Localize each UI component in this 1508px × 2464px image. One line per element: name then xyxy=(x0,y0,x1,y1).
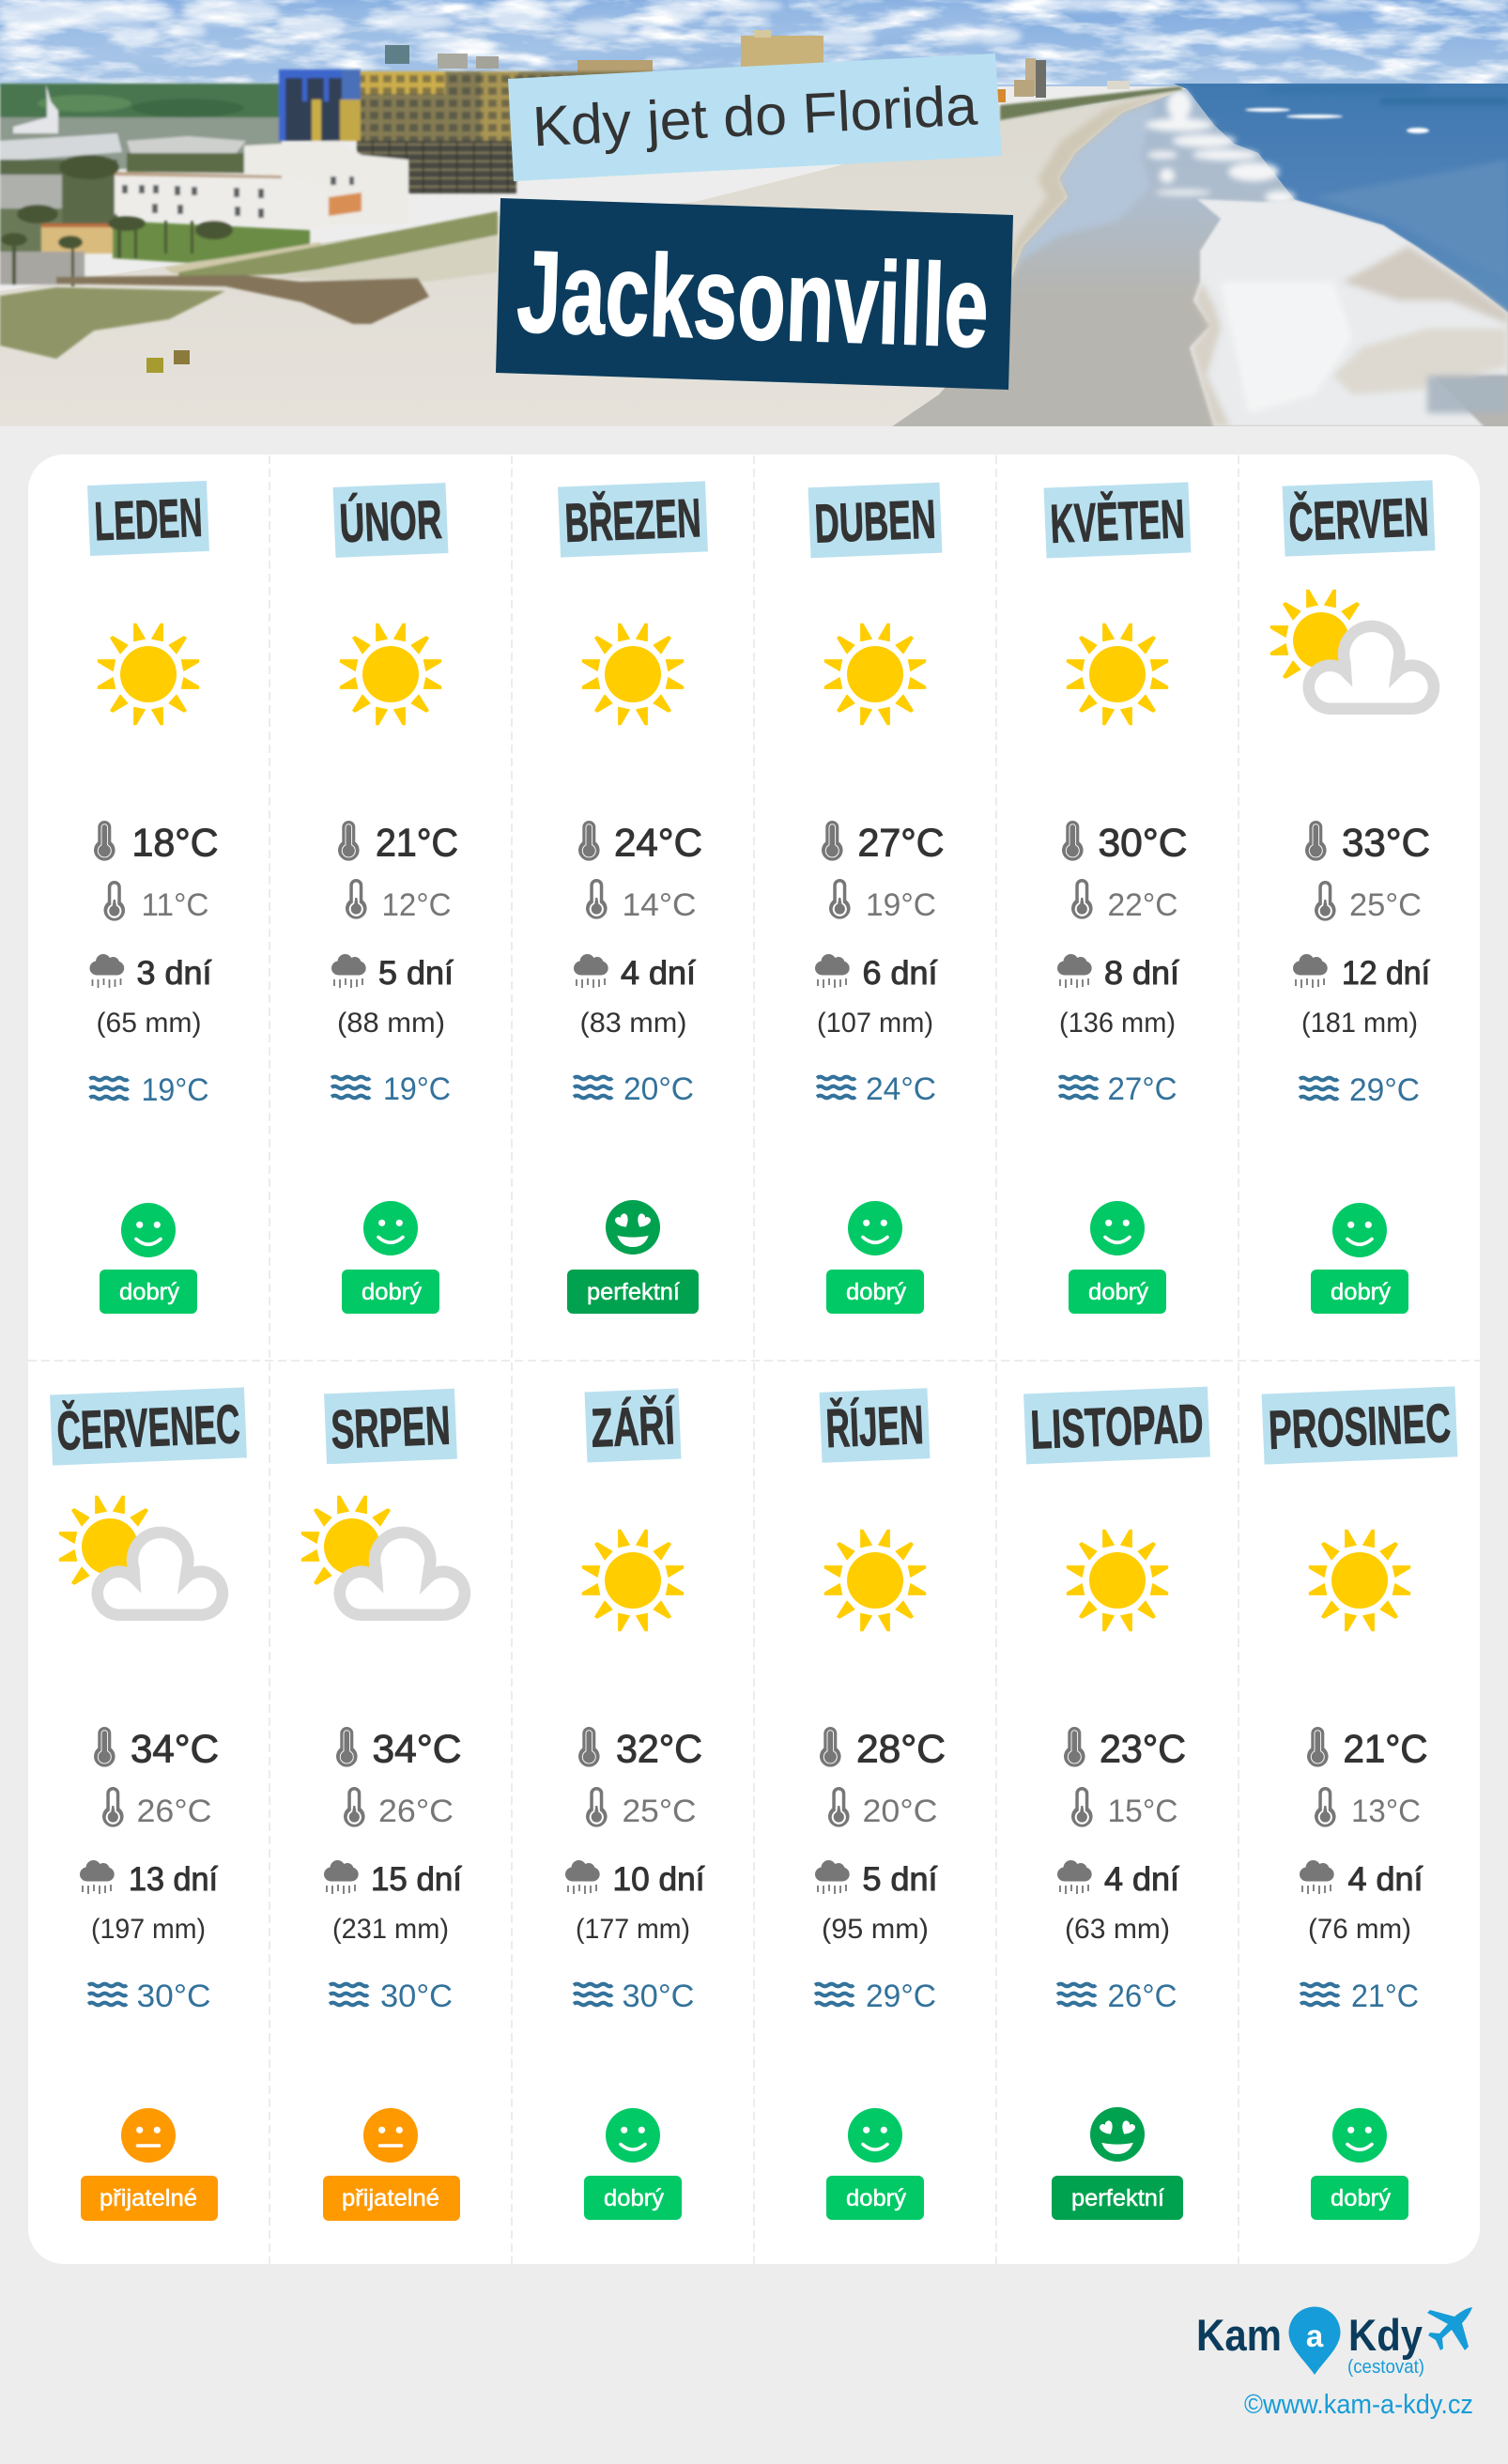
sea temperature: 30°C xyxy=(380,1979,453,2014)
rating badge: přijatelné xyxy=(342,2185,439,2211)
label: září xyxy=(585,1389,681,1462)
month: říjen xyxy=(815,1388,946,2220)
smiley: good xyxy=(1332,2108,1387,2163)
min temperature xyxy=(1315,1787,1421,1829)
rainfall: (231 mm) xyxy=(332,1914,449,1945)
rain days xyxy=(331,954,454,992)
min temperature: 20°C xyxy=(862,1794,937,1829)
month: únor xyxy=(331,483,458,1314)
rating badge: dobrý xyxy=(1088,1279,1149,1305)
rain days xyxy=(1300,1860,1423,1898)
sea temperature: 19°C xyxy=(141,1072,208,1108)
max temperature xyxy=(1307,1726,1427,1771)
rating badge: dobrý xyxy=(604,2185,665,2211)
label: duben xyxy=(808,483,942,558)
rating badge: perfektní xyxy=(587,1279,680,1305)
rain days: 4 dní xyxy=(1104,1861,1179,1898)
icon: sunny xyxy=(824,1530,926,1631)
min temperature xyxy=(1315,881,1422,923)
max temperature: 21°C xyxy=(376,821,458,864)
min temperature xyxy=(103,881,208,923)
min temperature: 25°C xyxy=(1349,887,1422,923)
month: srpen xyxy=(301,1389,465,2221)
rain days xyxy=(815,954,938,992)
max temperature: 34°C xyxy=(372,1726,462,1771)
month: červenec xyxy=(50,1387,247,2221)
rainfall: (95 mm) xyxy=(822,1914,929,1945)
rain days xyxy=(90,954,212,992)
rating badge xyxy=(1069,1270,1166,1314)
min temperature xyxy=(344,1787,454,1829)
min temperature: 14°C xyxy=(622,887,697,923)
icon: sunny xyxy=(582,624,684,725)
sea temperature xyxy=(817,1071,936,1107)
smiley: good xyxy=(848,1201,902,1255)
rating badge xyxy=(323,2176,460,2221)
sea temperature: 29°C xyxy=(866,1979,936,2014)
sea temperature xyxy=(88,1979,210,2014)
label: březen xyxy=(558,481,708,558)
rain days: 15 dní xyxy=(371,1861,462,1898)
rain days: 4 dní xyxy=(621,955,696,992)
label: únor xyxy=(333,483,448,558)
label: listopad xyxy=(1023,1387,1210,1464)
month: listopad xyxy=(1023,1387,1210,2220)
label: listopad: LISTOPAD xyxy=(1029,1393,1205,1461)
rating badge xyxy=(100,1270,197,1314)
smiley: perfect xyxy=(606,1200,660,1255)
label: červenec: ČERVENEC xyxy=(55,1394,241,1462)
max temperature xyxy=(338,821,458,864)
min temperature xyxy=(102,1787,212,1829)
month: březen xyxy=(558,481,708,1314)
label: srpen: SRPEN xyxy=(330,1394,452,1461)
rainfall: (76 mm) xyxy=(1308,1914,1411,1945)
label: květen: KVĚTEN xyxy=(1049,488,1186,555)
logo: Kam a Kdy (cestovat) xyxy=(1196,2306,1472,2378)
label: březen: BŘEZEN xyxy=(563,487,702,554)
label: květen xyxy=(1044,482,1191,559)
min temperature xyxy=(1071,1787,1177,1829)
smiley: acceptable xyxy=(121,2108,176,2163)
smiley: acceptable xyxy=(363,2108,418,2163)
rating badge xyxy=(1311,1270,1408,1314)
sea temperature xyxy=(90,1072,208,1108)
rating badge: dobrý xyxy=(119,1279,180,1305)
icon: map pin: a xyxy=(1306,2318,1324,2353)
rain days: 10 dní xyxy=(612,1861,705,1898)
max temperature: 18°C xyxy=(131,821,218,864)
min temperature: 22°C xyxy=(1108,887,1177,923)
label: únor: ÚNOR xyxy=(338,489,443,554)
sea temperature: 29°C xyxy=(1349,1072,1420,1108)
label: červen xyxy=(1283,480,1435,557)
month: duben xyxy=(808,483,945,1314)
icon: sunny xyxy=(1067,624,1168,725)
rating badge: perfektní xyxy=(1071,2185,1164,2211)
sea temperature xyxy=(1057,1979,1177,2014)
title banner: Jacksonville: Jacksonville xyxy=(515,227,991,372)
sea temperature xyxy=(574,1979,695,2014)
rating badge: dobrý xyxy=(846,1279,907,1305)
rainfall: (107 mm) xyxy=(817,1008,933,1039)
rain days: 13 dní xyxy=(129,1861,218,1898)
month: květen xyxy=(1044,482,1191,1314)
rain days: 6 dní xyxy=(862,955,938,992)
icon: map pin xyxy=(1288,2306,1341,2375)
rain days: 5 dní xyxy=(378,955,454,992)
rain days xyxy=(324,1860,462,1898)
label: srpen xyxy=(324,1389,457,1464)
sea temperature: 30°C xyxy=(137,1979,210,2014)
sea temperature: 19°C xyxy=(383,1071,451,1107)
min temperature xyxy=(586,1787,697,1829)
min temperature: 13°C xyxy=(1351,1794,1421,1829)
rainfall: (88 mm) xyxy=(337,1008,445,1039)
sea temperature xyxy=(1300,1072,1420,1108)
rain days xyxy=(80,1860,218,1898)
min temperature xyxy=(586,879,697,923)
rain days xyxy=(1057,954,1179,992)
month: červen xyxy=(1270,480,1435,1314)
icon: sunny xyxy=(340,624,441,725)
rating badge: dobrý xyxy=(362,1279,423,1305)
min temperature: 19°C xyxy=(866,887,936,923)
max temperature xyxy=(94,821,218,864)
smiley: good xyxy=(848,2108,902,2163)
rainfall: (181 mm) xyxy=(1301,1008,1418,1039)
rain days xyxy=(815,1860,938,1898)
sea temperature xyxy=(1059,1071,1177,1107)
rainfall: (197 mm) xyxy=(91,1914,206,1945)
rating badge: dobrý xyxy=(1331,1279,1392,1305)
title banner: Kdy jet do Florida: Kdy jet do Florida xyxy=(531,73,979,159)
rating badge xyxy=(1311,2176,1408,2220)
label: duben: DUBEN xyxy=(813,488,937,555)
rainfall: (136 mm) xyxy=(1059,1008,1176,1039)
max temperature: 32°C xyxy=(616,1726,702,1771)
sea temperature: 20°C xyxy=(623,1071,694,1107)
max temperature: 24°C xyxy=(614,821,702,864)
smiley: good xyxy=(363,1201,418,1255)
max temperature xyxy=(822,821,945,864)
rating badge: přijatelné xyxy=(100,2185,197,2211)
month: leden xyxy=(87,481,219,1314)
rating badge xyxy=(81,2176,218,2221)
month: září xyxy=(565,1389,705,2220)
max temperature xyxy=(578,1726,702,1771)
rain days xyxy=(565,1860,705,1898)
smiley: perfect xyxy=(1090,2107,1145,2162)
sea temperature: 24°C xyxy=(866,1071,936,1107)
rainfall: (63 mm) xyxy=(1065,1914,1170,1945)
label: září: ZÁŘÍ xyxy=(590,1394,677,1459)
min temperature xyxy=(346,879,451,923)
sea temperature xyxy=(574,1071,694,1107)
icon: partly cloudy xyxy=(301,1496,465,1615)
rating badge xyxy=(826,1270,924,1314)
icon: partly cloudy xyxy=(59,1496,223,1615)
icon: sunny xyxy=(1309,1530,1410,1631)
min temperature: 11°C xyxy=(141,887,208,923)
website credit: ©www.kam-a-kdy.cz xyxy=(1244,2390,1473,2420)
logo word: Kam: Kam xyxy=(1196,2310,1282,2360)
second row of months xyxy=(50,1386,1457,2221)
min temperature xyxy=(1071,879,1177,923)
sea temperature xyxy=(330,1979,453,2014)
min temperature: 15°C xyxy=(1108,1794,1177,1829)
min temperature xyxy=(829,879,936,923)
min temperature: 12°C xyxy=(381,887,451,923)
sea temperature: 30°C xyxy=(622,1979,695,2014)
max temperature: 27°C xyxy=(858,821,945,864)
min temperature: 26°C xyxy=(378,1794,454,1829)
label: říjen xyxy=(820,1388,930,1463)
title banner: Kdy jet do Florida xyxy=(508,54,1002,181)
min temperature xyxy=(828,1787,937,1829)
rain days: 8 dní xyxy=(1104,955,1179,992)
sea temperature xyxy=(1300,1979,1419,2014)
icon: sunny xyxy=(824,624,926,725)
logo word: Kdy: Kdy xyxy=(1348,2310,1423,2360)
title banner: Jacksonville xyxy=(496,198,1013,390)
sea temperature: 26°C xyxy=(1108,1979,1177,2014)
icon: plane xyxy=(1427,2307,1472,2350)
icon: partly cloudy xyxy=(1270,590,1434,709)
rain days xyxy=(1293,954,1430,992)
rain days: 12 dní xyxy=(1342,955,1430,992)
rain days xyxy=(574,954,696,992)
rain days xyxy=(1057,1860,1179,1898)
rain days: 5 dní xyxy=(862,1861,938,1898)
label: leden: LEDEN xyxy=(93,487,204,552)
max temperature: 30°C xyxy=(1099,821,1187,864)
label: leden xyxy=(87,481,209,556)
max temperature: 34°C xyxy=(131,1726,219,1771)
sea temperature: 21°C xyxy=(1351,1979,1419,2014)
max temperature: 28°C xyxy=(856,1726,946,1771)
icon: sunny xyxy=(582,1530,684,1631)
rain days: 4 dní xyxy=(1348,1861,1423,1898)
rain days: 3 dní xyxy=(137,955,212,992)
rainfall: (83 mm) xyxy=(580,1008,687,1039)
sea temperature: 27°C xyxy=(1108,1071,1177,1107)
smiley: good xyxy=(121,1203,176,1257)
rating badge xyxy=(1052,2176,1183,2220)
max temperature: 23°C xyxy=(1100,1726,1186,1771)
rating badge: dobrý xyxy=(846,2185,907,2211)
smiley: good xyxy=(1332,1203,1387,1257)
hero photo: Jacksonville beach xyxy=(0,0,1508,426)
rating badge xyxy=(567,1270,699,1314)
rating badge: dobrý xyxy=(1331,2185,1392,2211)
icon: sunny xyxy=(1067,1530,1168,1631)
min temperature: 25°C xyxy=(622,1794,697,1829)
rating badge xyxy=(342,1270,439,1314)
month: prosinec xyxy=(1262,1386,1457,2220)
max temperature: 21°C xyxy=(1343,1726,1427,1771)
sea temperature xyxy=(331,1071,451,1107)
rainfall: (177 mm) xyxy=(576,1914,690,1945)
icon: sunny xyxy=(98,624,199,725)
logo subtitle: (cestovat) xyxy=(1347,2357,1424,2378)
rating badge xyxy=(826,2176,924,2220)
sea temperature xyxy=(815,1979,936,2014)
label: říjen: ŘÍJEN xyxy=(824,1394,925,1459)
smiley: good xyxy=(1090,1201,1145,1255)
min temperature: 26°C xyxy=(137,1794,212,1829)
rainfall: (65 mm) xyxy=(96,1008,201,1039)
smiley: good xyxy=(606,2108,660,2163)
rating badge xyxy=(584,2176,682,2220)
panel: monthly climate table xyxy=(28,454,1480,2264)
max temperature xyxy=(1064,1726,1186,1771)
max temperature: 33°C xyxy=(1342,821,1430,864)
label: červenec xyxy=(50,1387,247,1466)
